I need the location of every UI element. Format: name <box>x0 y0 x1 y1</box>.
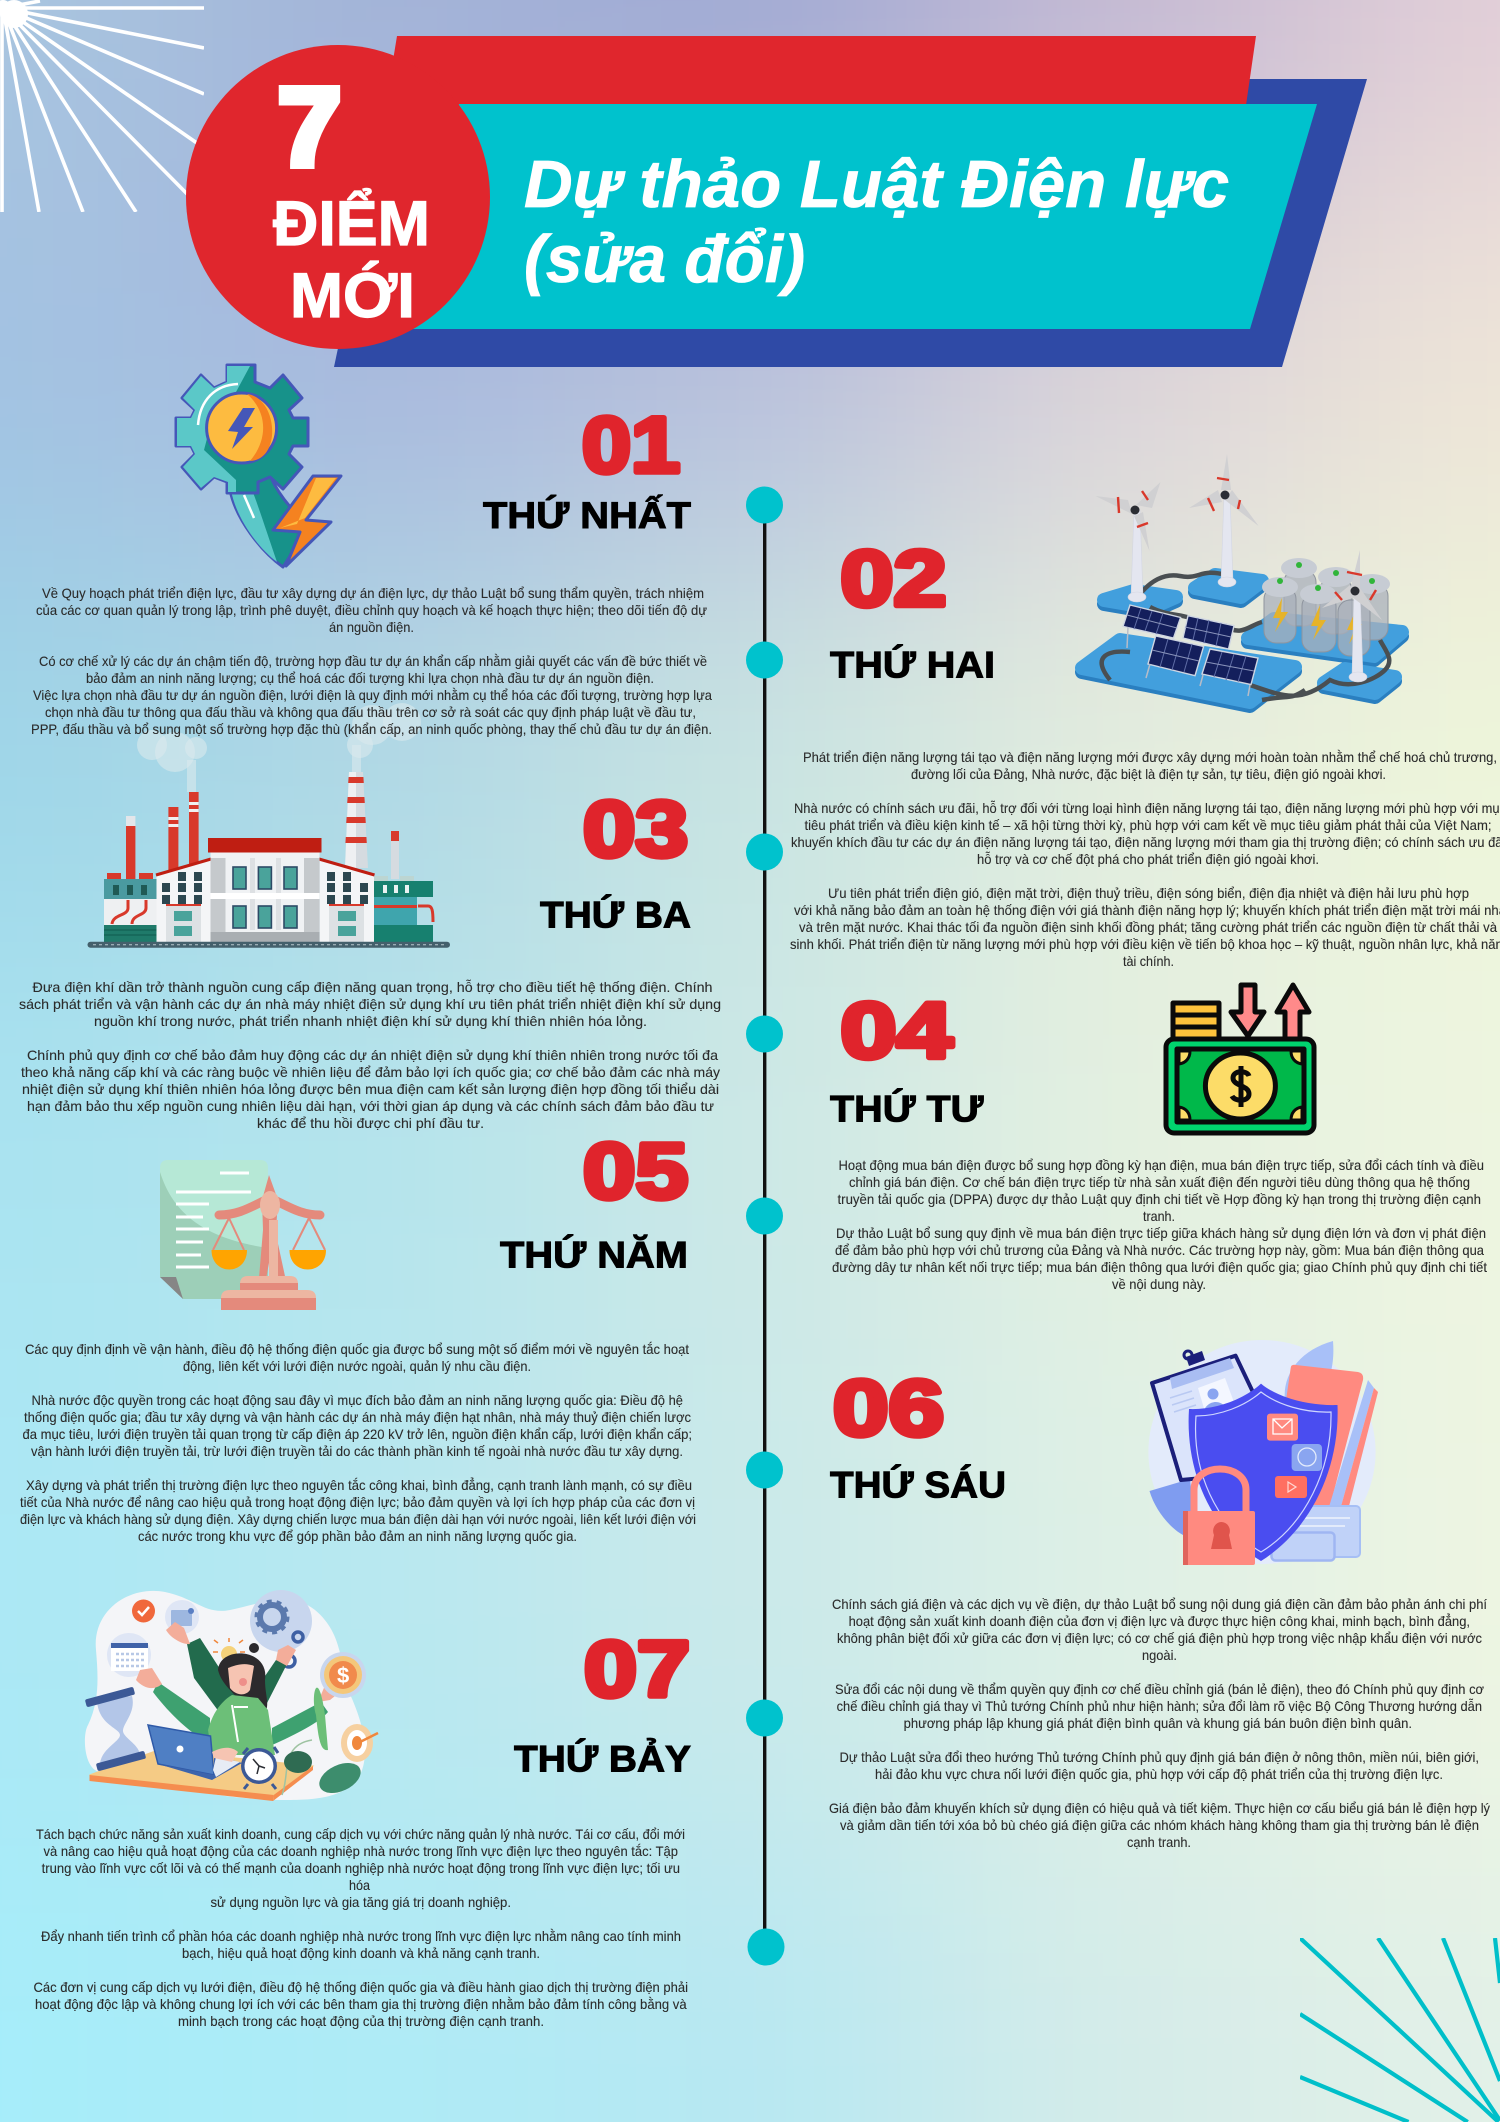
text block 05: Nhà nước độc quyền trong các hoạt động sau đây vì mục đích bảo đảm an ninh năng lượng quốc gia: Điều độ hệ <box>32 1392 683 1408</box>
text block 02: đường lối của Đảng, Nhà nước, đặc biệt là điện tự sản, tự tiêu, điện gió ngoài khơi. <box>911 766 1386 782</box>
section 02 <box>790 454 1500 969</box>
wings <box>156 860 210 942</box>
text block 05: Các quy định định về vận hành, điều độ hệ thống điện quốc gia được bổ sung một số điểm mới về nguyên tắc hoạt <box>25 1341 689 1357</box>
decorative rays: top left <box>0 0 204 212</box>
text block 02 <box>790 749 1500 969</box>
text block 01 <box>31 585 712 737</box>
text block 01: Về Quy hoạch phát triển điện lực, đầu tư xây dựng dự án điện lực, dự thảo Luật bổ sung thẩm quyền, trách nhiệm <box>42 585 704 601</box>
section 07 <box>34 1590 691 2029</box>
text block 05: thống điện quốc gia; đầu tư xây dựng và vận hành các dự án nhà máy điện hạt nhân, nhà máy thuỷ điện chiến lược <box>24 1409 691 1425</box>
icon: money with arrows <box>1166 985 1314 1133</box>
section 06 <box>829 1340 1490 1850</box>
section 03 <box>19 772 721 1131</box>
text block 06: ngoài. <box>1142 1647 1177 1663</box>
text block 05 <box>20 1341 696 1544</box>
left annex <box>104 879 157 899</box>
heading: thứ nhất: THỨ NHẤT <box>483 494 691 536</box>
text block 03: sách phát triển và vận hành các dự án nhà máy nhiệt điện sử dụng khí ưu tiên phát triển nhiệt điện khí sử dụng <box>19 996 721 1012</box>
heading: thứ năm: THỨ NĂM <box>500 1234 688 1276</box>
header banner <box>186 36 1367 367</box>
badge text: 7: 7 <box>278 66 341 189</box>
text block 01: PPP, đấu thầu và bổ sung một số trường hợp đặc thù (khẩn cấp, an ninh quốc phòng, thay thế chủ đầu tư dự án điện. <box>31 721 712 737</box>
text block 07: và nâng cao hiệu quả hoạt động của các doanh nghiệp nhà nước trong lĩnh vực điện lực theo nguyên tắc: Tập <box>44 1843 678 1859</box>
text block 01: án nguồn điện. <box>329 619 414 635</box>
text block 07: bạch, hiệu quả hoạt động kinh doanh và khả năng cạnh tranh. <box>182 1945 540 1961</box>
text block 05: các nước trong khu vực để góp phần bảo đảm an ninh năng lượng quốc gia. <box>138 1528 577 1544</box>
heading: thứ bảy: THỨ BẢY <box>514 1738 691 1780</box>
text block 07: trung vào lĩnh vực cốt lõi và có thế mạnh của doanh nghiệp nhà nước hoạt động trong lĩnh vực điện lực; tối ưu <box>42 1860 680 1876</box>
heading: thứ tư: THỨ TƯ <box>830 1088 984 1130</box>
text block 02: Ưu tiên phát triển điện gió, điện mặt trời, điện thuỷ triều, điện sóng biển, điện địa nhiệt và điện hải lưu phù hợp <box>828 885 1469 901</box>
text block 07: Tách bạch chức năng sản xuất kinh doanh, cung cấp dịch vụ với chức năng quản lý nhà nước. Tái cơ cấu, đổi mới <box>36 1826 685 1842</box>
banner back: blue <box>334 79 1367 367</box>
text block 04: tranh. <box>1143 1208 1175 1224</box>
icon: multitasking woman: $ <box>337 1663 349 1688</box>
text block 03: Đưa điện khí dần trở thành nguồn cung cấp điện năng quan trọng, hỗ trợ cho điều tiết hệ thống điện. Chính <box>32 979 712 995</box>
text block 03: khác để thu hồi được chi phí đầu tư. <box>257 1115 484 1131</box>
text block 03: nhiệt điện sử dụng khí thiên nhiên hóa lỏng được bên mua điện cam kết sản lượng điện hợp đồng tối thiểu dài <box>22 1081 719 1097</box>
text block 03 <box>19 979 721 1131</box>
number 07: 07 <box>584 1624 690 1713</box>
timeline dots <box>746 486 784 1966</box>
text block 04: truyền tải quốc gia (DPPA) được dự thảo Luật quy định chi tiết về Hợp đồng kỳ hạn trong thị trường điện cạnh <box>838 1191 1481 1207</box>
title: (sửa đổi) <box>524 222 805 297</box>
text block 05: điện lực và khách hàng sử dụng điện. Xây dựng chiến lược mua bán điện dài hạn với nước ngoài, liên kết lưới điện với <box>20 1511 696 1527</box>
icon: wind, solar and battery <box>1082 454 1402 706</box>
text block 07: sử dụng nguồn lực và gia tăng giá trị doanh nghiệp. <box>210 1894 511 1910</box>
heading: thứ sáu: THỨ SÁU <box>830 1464 1006 1506</box>
text block 06: phương pháp lập khung giá phát điện bình quân và khung giá bán buôn điện bình quân. <box>904 1715 1412 1731</box>
heading: thứ hai: THỨ HAI <box>830 644 995 686</box>
text block 03: theo khả năng cấp khí và các ràng buộc về nhiên liệu để đảm bảo lợi ích quốc gia; cơ chế bảo đảm các nhà máy <box>21 1064 720 1080</box>
text block 05: động, liên kết với lưới điện nước ngoài, quản lý nhu cầu điện. <box>183 1358 531 1374</box>
text block 07: Các đơn vị cung cấp dịch vụ lưới điện, điều độ hệ thống điện quốc gia và điều hành giao dịch thị trường điện phải <box>34 1979 688 1995</box>
icon: document and scale <box>160 1160 326 1310</box>
section 05 <box>20 1126 696 1544</box>
text block 01: chọn nhà đầu tư thông qua đấu thầu và không qua đấu thầu trên cơ sở rà soát các quy định pháp luật về đầu tư, <box>45 704 696 720</box>
text block 01: bảo đảm an ninh năng lượng; cụ thể hoá các đối tượng khi lựa chọn nhà đầu tư dự án nguồn điện. <box>86 670 654 686</box>
decorative rays: bottom right <box>1300 1938 1500 2122</box>
text block 07: Đẩy nhanh tiến trình cổ phần hóa các doanh nghiệp nhà nước trong lĩnh vực điện lực nhằm nâng cao tính minh <box>41 1928 681 1944</box>
main building <box>210 852 320 942</box>
icon: gear with lightning pin <box>176 365 341 567</box>
text block 03: Chính phủ quy định cơ chế bảo đảm huy động các dự án nhiệt điện sử dụng khí thiên nhiên trong nước tối đa <box>27 1047 718 1063</box>
text block 03: hạn đảm bảo thu xếp nguồn cung nhiên liệu dài hạn, với thời gian áp dụng và các chính sách đảm bảo đầu tư <box>27 1098 714 1114</box>
number 05: 05 <box>583 1126 688 1215</box>
icon: shield, lock and documents <box>1148 1340 1378 1565</box>
text block 02: hỗ trợ và cơ chế đột phá cho phát triển điện gió ngoài khơi. <box>977 851 1319 867</box>
text block 05: tiết của Nhà nước để nâng cao hiệu quả trong hoạt động điện lực; bảo đảm quyền và lợi ích hợp pháp của các đơn vị <box>20 1494 695 1510</box>
icon: power plant <box>88 772 450 948</box>
number 06: 06 <box>833 1363 944 1452</box>
plant smoke behind text <box>137 703 421 792</box>
text block 05: đa mục tiêu, lưới điện truyền tải quan trọng từ cấp điện áp 220 kV trở lên, nguồn điện khẩn cấp, lưới điện khẩn cấp; <box>22 1426 692 1442</box>
text block 06: hải đảo khu vực chưa nối lưới điện quốc gia, phù hợp với cấp độ phát triển của thị trường điện lực. <box>875 1766 1443 1782</box>
text block 07 <box>34 1826 688 2029</box>
text block 02: tài chính. <box>1123 953 1174 969</box>
number 04: 04 <box>840 986 953 1074</box>
chimneys <box>126 816 135 828</box>
icon: multitasking woman <box>85 1590 378 1801</box>
number 01: 01 <box>582 400 680 489</box>
title <box>524 147 1229 297</box>
number 02: 02 <box>840 534 946 622</box>
section 04 <box>830 985 1487 1292</box>
text block 05: Xây dựng và phát triển thị trường điện lực theo nguyên tắc công khai, bình đẳng, cạnh tranh lành mạnh, có sự điều <box>26 1476 692 1493</box>
banner front: teal <box>400 104 1317 329</box>
text block 06 <box>829 1596 1490 1850</box>
text block 04: về nội dung này. <box>1112 1276 1206 1292</box>
text block 06: cạnh tranh. <box>1127 1834 1191 1850</box>
text block 07: hoạt động độc lập và không chung lợi ích với các bên tham gia thị trường điện nhằm bảo đảm tính công bằng và <box>35 1996 687 2012</box>
title: Dự thảo Luật Điện lực <box>524 147 1229 222</box>
text block 04: chỉnh giá bán điện. Cơ chế bán điện trực tiếp từ nhà sản xuất điện đến người tiêu dùng thông qua hệ thống <box>849 1174 1470 1190</box>
banner back: red <box>380 36 1256 140</box>
timeline <box>746 486 784 1966</box>
badge text: ĐIỂM: ĐIỂM <box>273 188 430 259</box>
text block 05: vận hành lưới điện truyền tải, trừ lưới điện truyền tải do các thành phần kinh tế ngoài nhà nước đầu tư xây dựng. <box>31 1443 683 1459</box>
text block 04 <box>832 1157 1487 1292</box>
text block 01: Việc lựa chọn nhà đầu tư dự án nguồn điện, lưới điện là quy định mới nhằm cụ thể hóa các đối tượng, trường hợp lựa <box>33 687 712 703</box>
text block 01: của các cơ quan quản lý trong lập, trình phê duyệt, điều chỉnh quy hoạch và kế hoạch thực hiện; theo dõi tiến độ dự <box>36 602 707 618</box>
right annex <box>374 881 433 897</box>
text block 07: hóa <box>349 1877 370 1893</box>
text block 03: nguồn khí trong nước, phát triển nhanh nhiệt điện khí sử dụng khí thiên nhiên hóa lỏng. <box>94 1013 647 1029</box>
text block 07: minh bạch trong các hoạt động của thị trường điện cạnh tranh. <box>178 2013 544 2029</box>
heading: thứ ba: THỨ BA <box>540 894 691 936</box>
number 03: 03 <box>583 784 688 873</box>
badge text: MỚI: MỚI <box>290 261 415 331</box>
section 01 <box>31 365 712 737</box>
red circle badge <box>186 45 490 349</box>
text block 01: Có cơ chế xử lý các dự án chậm tiến độ, trường hợp đầu tư dự án khẩn cấp nhằm giải quyết các vấn đề bức thiết về <box>39 653 707 669</box>
